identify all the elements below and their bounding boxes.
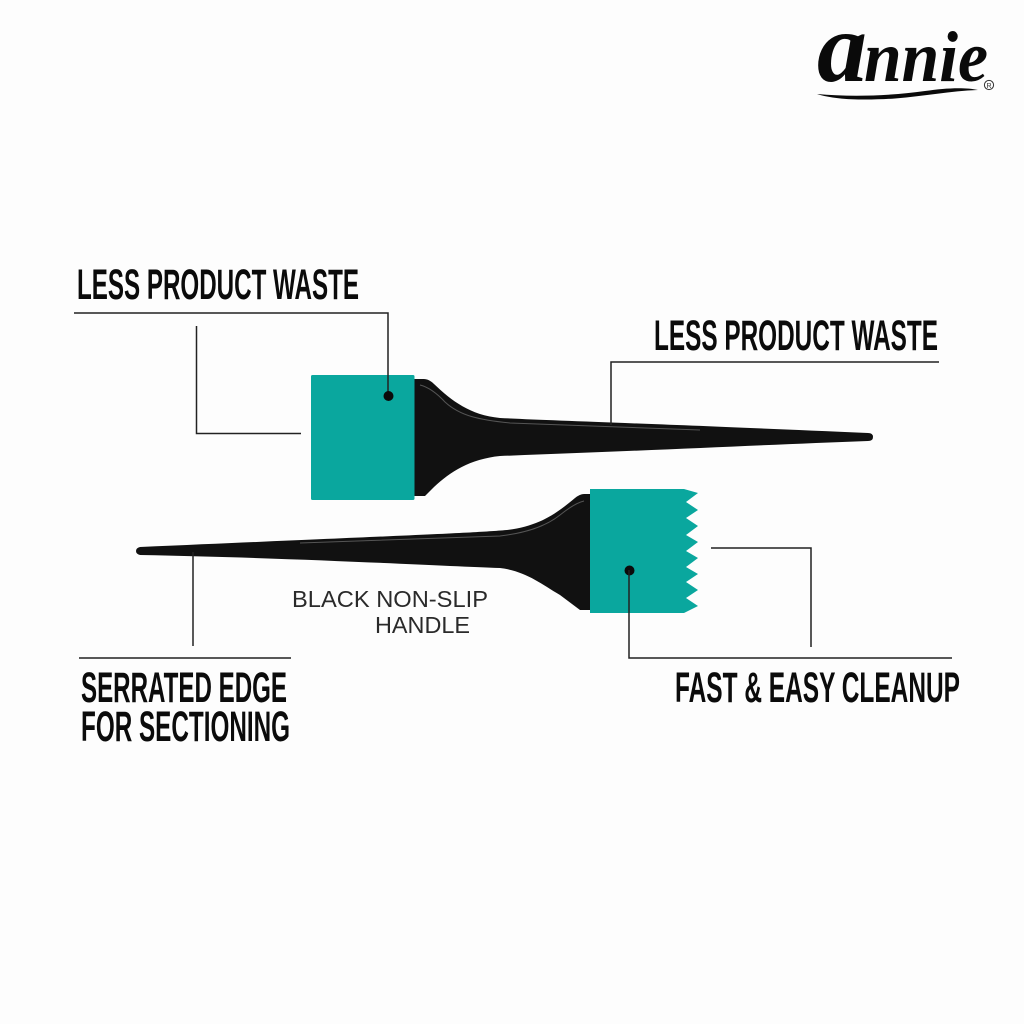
label: black non-slip handle: BLACK NON-SLIP: [292, 586, 488, 612]
label: black non-slip handle: HANDLE: [375, 612, 470, 638]
divider under leader: [79, 657, 291, 659]
brush: top, plain edge: [311, 375, 873, 500]
callout: bottom left: [79, 552, 291, 751]
handle highlight: top brush: [420, 385, 700, 430]
logo: Annie: [817, 0, 994, 103]
leader line to handle tip: [192, 552, 194, 646]
brush: bottom, serrated edge: [136, 489, 698, 613]
heading: serrated edge for sectioning: SERRATED EDGE: [81, 664, 287, 712]
bristles: bottom brush teal head with serrated edge: [590, 489, 698, 613]
label: black non-slip handle: [292, 586, 488, 638]
callout: bottom right: [624, 566, 960, 712]
logo: Annie: nnie: [864, 17, 988, 97]
callout: top left: [74, 261, 394, 401]
handle highlight: bottom brush: [300, 501, 584, 543]
heading: serrated edge for sectioning: [81, 664, 290, 751]
leader line to handle: [611, 362, 939, 425]
bracket line: bottom brush right: [711, 548, 811, 647]
leader line with dot: [624, 566, 952, 658]
handle: top brush: [414, 379, 873, 496]
logo: Annie: R: [986, 83, 992, 90]
heading: serrated edge for sectioning: FOR SECTIONING: [81, 703, 290, 751]
bracket line: top brush left: [196, 326, 301, 434]
callout: top right: [611, 312, 939, 425]
handle: bottom brush: [136, 494, 590, 610]
bristles: top brush teal head: [311, 375, 414, 500]
leader line with dot: [74, 313, 394, 401]
heading: less product waste left: LESS PRODUCT WASTE: [77, 261, 359, 309]
